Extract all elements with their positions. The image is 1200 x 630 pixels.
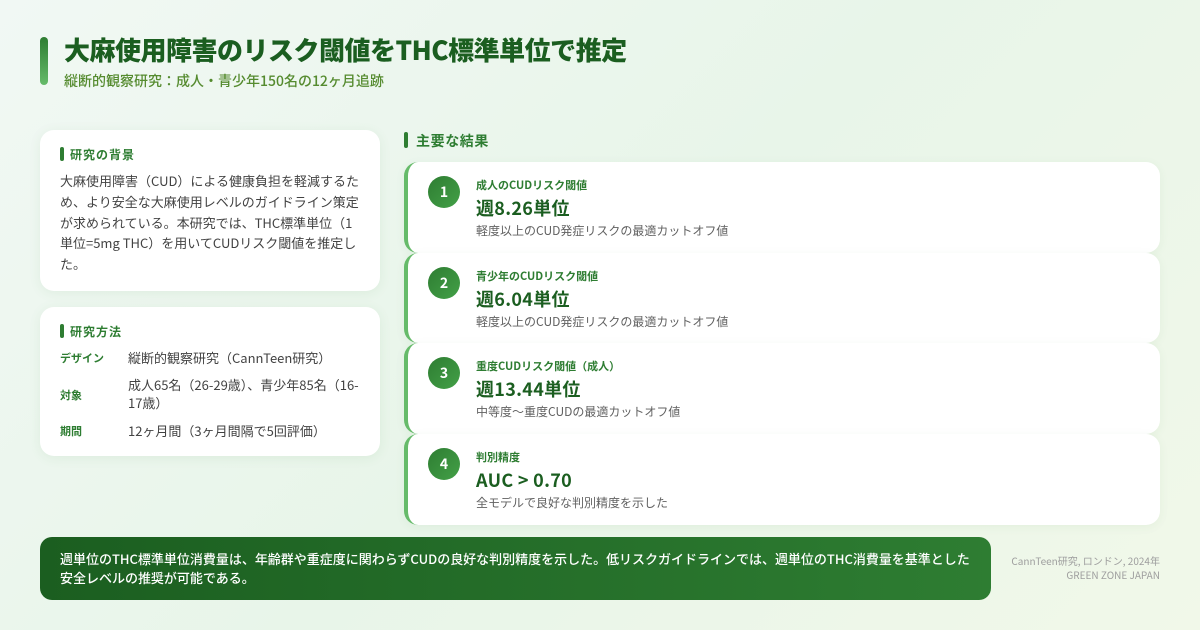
subtitle: 縦断的観察研究：成人・青少年150名の12ヶ月追跡 [64, 71, 384, 91]
row: subjects: 17歳） [128, 393, 168, 412]
heading: research methods: 研究方法 [70, 323, 122, 340]
label: 青少年のCUDリスク閾値 [476, 268, 598, 284]
result card 3 [404, 343, 1160, 434]
heading: key results: 主要な結果 [416, 131, 489, 151]
description: 全モデルで良好な判別精度を示した [476, 494, 668, 511]
number badge 1 [428, 176, 460, 208]
row: subjects: 成人65名（26-29歳）、青少年85名（16- [128, 375, 359, 394]
background text: が求められている。本研究では、THC標準単位（1 [60, 213, 352, 232]
row: period: 12ヶ月間（3ヶ月間隔で5回評価） [128, 421, 326, 440]
number badge 1: 1 [440, 182, 448, 202]
background text: め、より安全な大麻使用レベルのガイドライン策定 [60, 192, 359, 211]
number badge 2: 2 [440, 273, 448, 293]
label: 成人のCUDリスク閾値 [476, 177, 587, 193]
number badge 2 [428, 267, 460, 299]
row: period: 期間 [60, 423, 82, 439]
conclusion text [60, 549, 970, 587]
result card 4 [404, 434, 1160, 525]
number badge 4 [428, 448, 460, 480]
title: 大麻使用障害のリスク閾値をTHC標準単位で推定 [64, 31, 627, 68]
number badge 3 [428, 357, 460, 389]
row: design: デザイン [60, 350, 104, 366]
background text [60, 171, 359, 273]
panel: research methods [40, 307, 380, 456]
background text: た。 [60, 254, 86, 273]
description: 中等度〜重度CUDの最適カットオフ値 [476, 403, 680, 420]
heading: research background: 研究の背景 [70, 146, 135, 163]
source credit: CannTeen研究, ロンドン, 2024年 [1011, 553, 1160, 568]
background text: 大麻使用障害（CUD）による健康負担を軽減するた [60, 171, 359, 190]
conclusion text: 安全レベルの推奨が可能である。 [60, 568, 255, 587]
description: 軽度以上のCUD発症リスクの最適カットオフ値 [476, 313, 728, 330]
value: 週8.26単位 [476, 195, 570, 221]
result card 1 [404, 162, 1160, 253]
source credit [1011, 553, 1160, 582]
conclusion banner [40, 537, 991, 600]
row: design: 縦断的観察研究（CannTeen研究） [128, 348, 331, 367]
row: subjects [60, 375, 359, 412]
result card 2 [404, 253, 1160, 343]
value: AUC > 0.70 [476, 467, 572, 493]
background text: 単位=5mg THC）を用いてCUDリスク閾値を推定し [60, 233, 356, 252]
row: subjects: 対象 [60, 387, 82, 403]
title accent bar [40, 37, 48, 85]
value: 週6.04単位 [476, 286, 570, 312]
conclusion text: 週単位のTHC標準単位消費量は、年齢群や重症度に関わらずCUDの良好な判別精度を示した。低リスクガイドラインでは、週単位のTHC消費量を基準とした [60, 549, 970, 568]
label: 判別精度 [476, 449, 520, 465]
source credit: GREEN ZONE JAPAN [1066, 567, 1160, 582]
panel: research background [40, 130, 380, 291]
label: 重度CUDリスク閾値（成人） [476, 358, 620, 374]
description: 軽度以上のCUD発症リスクの最適カットオフ値 [476, 222, 728, 239]
value: 週13.44単位 [476, 376, 581, 402]
number badge 3: 3 [440, 363, 448, 383]
number badge 4: 4 [440, 454, 448, 474]
